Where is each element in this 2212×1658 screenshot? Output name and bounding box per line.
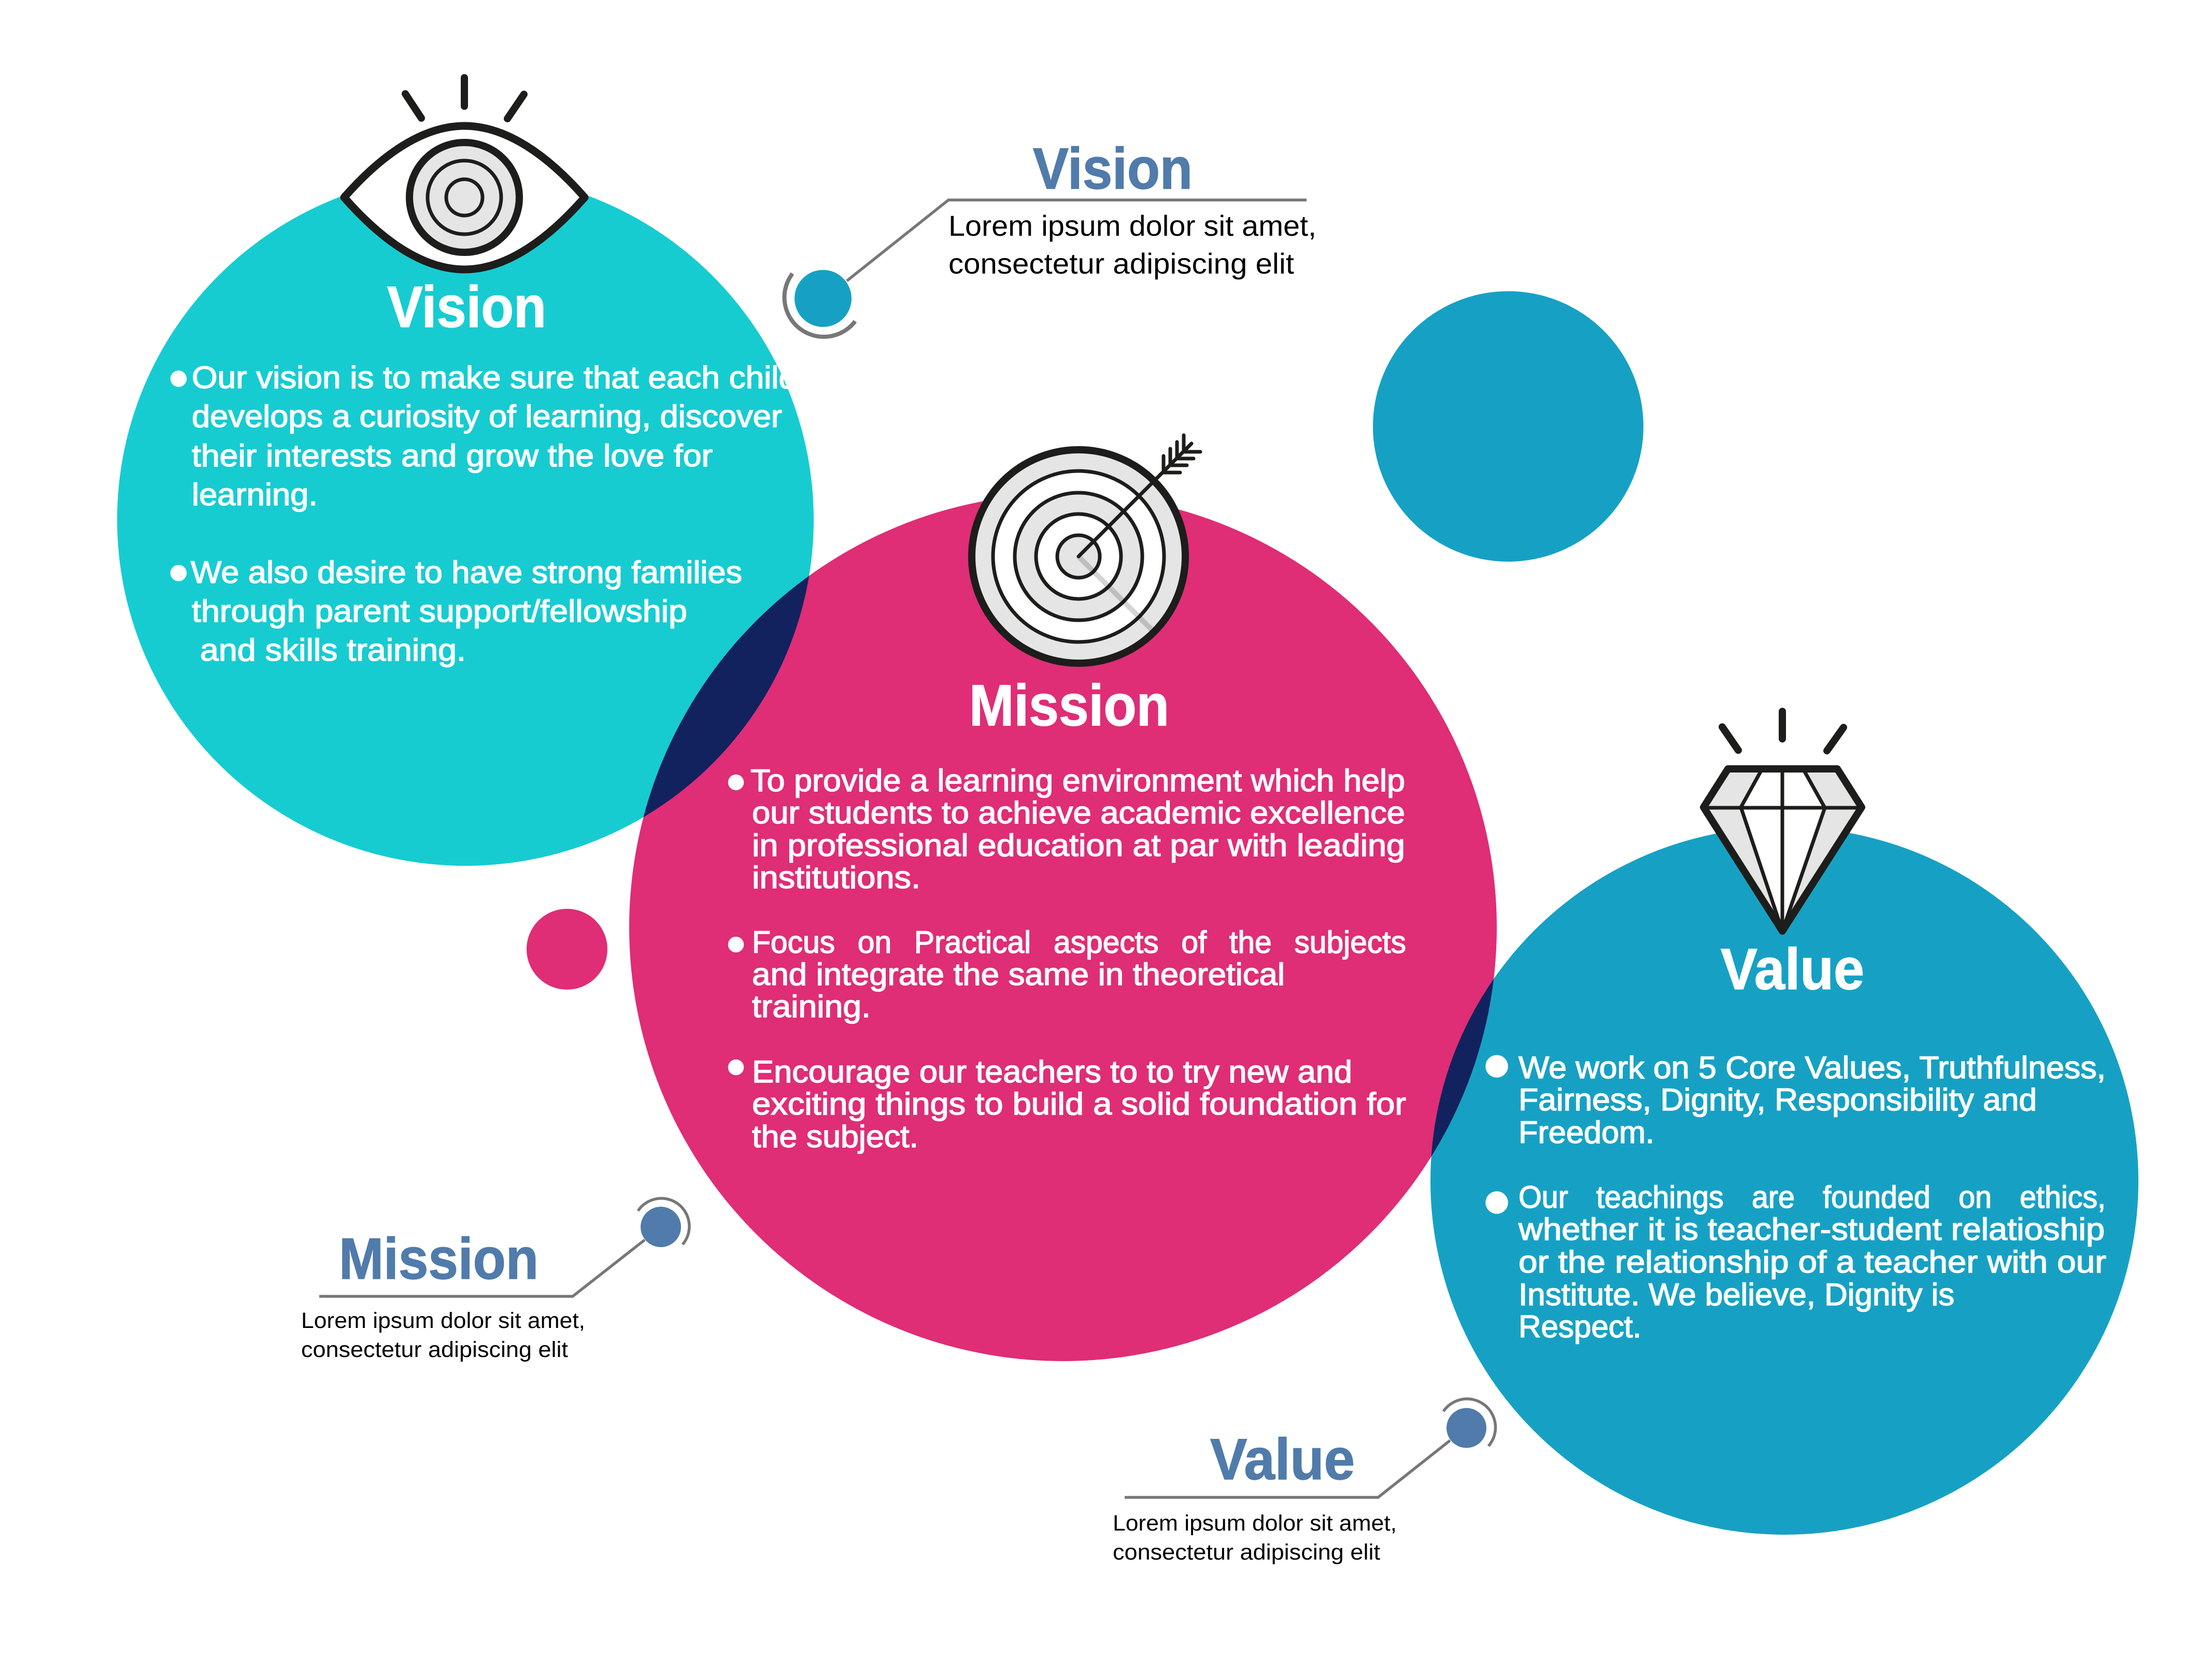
- overlap: vision and mission: [644, 576, 810, 818]
- mission text: training.: [752, 989, 871, 1024]
- mission text: and integrate the same in theoretical: [752, 957, 1285, 992]
- value text: We work on 5 Core Values, Truthfulness,: [1519, 1050, 2106, 1085]
- callout text: consectetur adipiscing elit: [301, 1337, 568, 1362]
- vision text: through parent support/fellowship: [192, 594, 687, 628]
- panel: value: [1430, 711, 2138, 1535]
- callout text: consectetur adipiscing elit: [948, 247, 1294, 280]
- callout heading: Mission: [339, 1226, 538, 1291]
- mission heading: Mission: [969, 673, 1169, 738]
- mission text: Focus on Practical aspects of the subjects: [752, 925, 1406, 960]
- value text: Our teachings are founded on ethics,: [1519, 1180, 2106, 1214]
- mission text: in professional education at par with leading: [752, 828, 1405, 863]
- value text: Institute. We believe, Dignity is: [1519, 1277, 1954, 1312]
- callout heading: Vision: [1033, 136, 1193, 201]
- value heading: Value: [1721, 937, 1864, 1002]
- callout marker: [1443, 1399, 1495, 1448]
- decorative pink circle: [527, 909, 607, 990]
- value text: Fairness, Dignity, Responsibility and: [1519, 1082, 2037, 1117]
- icon: diamond: [1704, 711, 1862, 931]
- callout: vision: [784, 136, 1316, 337]
- mission text: [729, 763, 1406, 1154]
- value circle: [1430, 827, 2138, 1535]
- mission text: the subject.: [752, 1119, 918, 1154]
- callout marker: [638, 1198, 689, 1247]
- panel: vision: [117, 78, 814, 866]
- callout text: Lorem ipsum dolor sit amet,: [948, 209, 1316, 242]
- callout text: consectetur adipiscing elit: [1113, 1540, 1380, 1565]
- value text: or the relationship of a teacher with our: [1519, 1245, 2106, 1279]
- callout text: Lorem ipsum dolor sit amet,: [301, 1308, 585, 1333]
- callout connector line: [319, 1240, 645, 1296]
- vision text: We also desire to have strong families: [191, 555, 742, 590]
- mission text: To provide a learning environment which help: [750, 763, 1405, 798]
- value text: Freedom.: [1519, 1115, 1654, 1150]
- vision text: Our vision is to make sure that each child: [192, 360, 797, 395]
- mission circle: [629, 494, 1497, 1361]
- callout text: Lorem ipsum dolor sit amet,: [1113, 1511, 1397, 1536]
- vision circle: [117, 174, 814, 866]
- callout heading: Value: [1210, 1427, 1355, 1492]
- vision heading: Vision: [387, 275, 546, 339]
- mission text: our students to achieve academic excellence: [752, 795, 1405, 830]
- callout: value: [1113, 1399, 1495, 1565]
- icon: target with arrow: [972, 435, 1200, 663]
- callout marker: [784, 270, 855, 337]
- mission text: exciting things to build a solid foundation for: [752, 1087, 1406, 1121]
- mission text: institutions.: [752, 860, 920, 895]
- icon: eye: [344, 78, 585, 269]
- callout text: [301, 1308, 585, 1362]
- callout text: [948, 209, 1316, 280]
- decorative blue circle: [1373, 291, 1643, 562]
- vision text: their interests and grow the love for: [192, 438, 713, 473]
- mission text: Encourage our teachers to to try new and: [752, 1054, 1352, 1089]
- vision text: and skills training.: [200, 633, 466, 667]
- panel: mission: [629, 435, 1497, 1361]
- overlap: mission and value: [1431, 979, 1494, 1156]
- callout: mission: [301, 1198, 689, 1362]
- callout connector line: [847, 200, 1307, 281]
- value text: whether it is teacher-student relatioship: [1518, 1212, 2105, 1247]
- value text: Respect.: [1519, 1309, 1641, 1344]
- vision text: [171, 360, 797, 667]
- vision text: develops a curiosity of learning, discover: [192, 399, 782, 434]
- vision text: learning.: [192, 477, 318, 512]
- value text: [1486, 1050, 2106, 1344]
- callout connector line: [1125, 1440, 1450, 1497]
- callout text: [1113, 1511, 1397, 1565]
